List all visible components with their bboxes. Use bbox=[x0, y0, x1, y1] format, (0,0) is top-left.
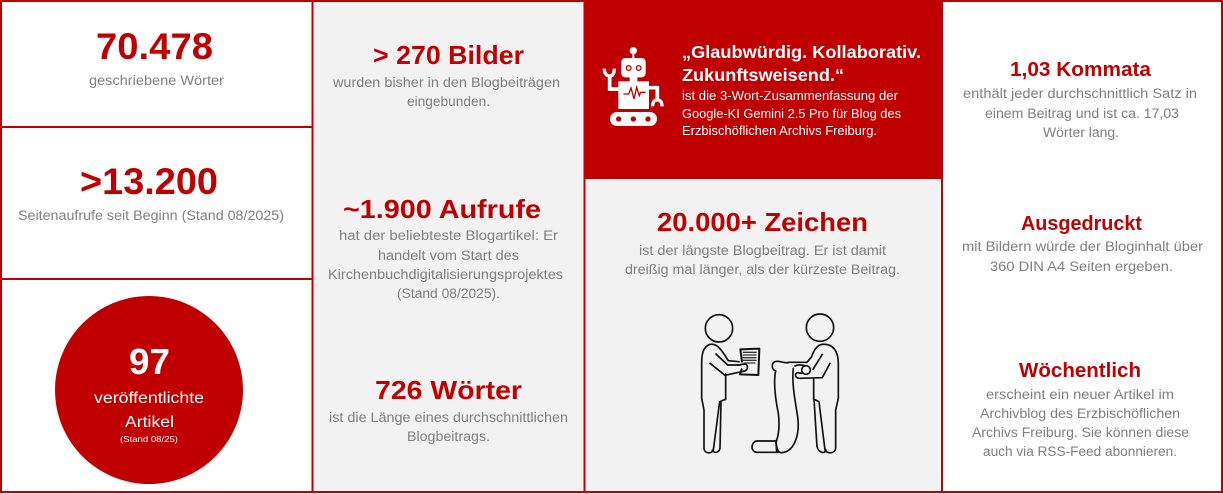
panel: Seitenaufrufe bbox=[1, 127, 312, 279]
panel: KI-Zusammenfassung bbox=[585, 1, 942, 179]
icon: person reading a sheet bbox=[702, 315, 759, 453]
stat block: Ausgedruckt bbox=[962, 213, 1203, 275]
stat block: Zeichen: 20.000+ Zeichen bbox=[657, 207, 868, 237]
stat block: Ausgedruckt: mit Bildern würde der Bloginhalt über bbox=[962, 239, 1203, 255]
stat block: Bilder: wurden bisher in den Blogbeiträgen bbox=[332, 75, 560, 91]
panel: Fakten rechts bbox=[943, 1, 1222, 492]
icon: person holding a long scroll bbox=[752, 314, 838, 453]
panel: veroeffentlichte Artikel bbox=[1, 279, 312, 492]
text: KI-Beschreibung: Google-KI Gemini 2.5 Pro für Blog des bbox=[682, 107, 901, 121]
stat block: Woechentlich: erscheint ein neuer Artikel im bbox=[986, 387, 1174, 403]
stat block: Bilder: > 270 Bilder bbox=[373, 40, 524, 70]
stat block: Aufrufe bbox=[328, 194, 563, 302]
stat block: Bilder: eingebunden. bbox=[407, 94, 490, 110]
text: KI-Beschreibung: ist die 3-Wort-Zusammenfassung der bbox=[682, 89, 898, 103]
circle badge: 97 Artikel bbox=[55, 296, 243, 484]
stat block: Aufrufe: (Stand 08/2025). bbox=[397, 286, 500, 302]
circle badge: 97 Artikel: 97 bbox=[129, 341, 170, 382]
stat block: Aufrufe: handelt vom Start des bbox=[378, 248, 519, 264]
circle badge: 97 Artikel: Artikel bbox=[125, 414, 174, 431]
stat block: Aufrufe: Kirchenbuchdigitalisierungsprojektes bbox=[328, 267, 563, 283]
stat block: Woerter: 726 Wörter bbox=[375, 375, 522, 405]
stat block: Woechentlich: Archivs Freiburg. Sie können diese bbox=[972, 425, 1189, 441]
stat block: Zeichen: ist der längste Blogbeitrag. Er ist damit bbox=[639, 243, 886, 259]
stat block: Woerter bbox=[329, 375, 568, 445]
icon: robot bbox=[604, 47, 662, 126]
stat block: Aufrufe: hat der beliebteste Blogartikel: Er bbox=[339, 228, 558, 244]
stat block: Aufrufe: ~1.900 Aufrufe bbox=[343, 194, 541, 224]
text: KI-Beschreibung bbox=[682, 89, 901, 138]
stat: 13.200: >13.200 bbox=[80, 161, 218, 202]
stat block: Bilder bbox=[332, 40, 560, 110]
panel: geschriebene Woerter bbox=[1, 1, 312, 127]
stat block: Kommata: 1,03 Kommata bbox=[1010, 59, 1152, 81]
stat block: Zeichen: dreißig mal länger, als der kürzeste Beitrag. bbox=[625, 262, 900, 278]
caption: geschriebene Woerter: geschriebene Wörter bbox=[89, 73, 224, 89]
stat block: Woechentlich: Archivblog des Erzbischöflichen bbox=[980, 406, 1180, 422]
stat block: Kommata: einem Beitrag und ist ca. 17,03 bbox=[985, 106, 1179, 122]
circle badge: 97 Artikel: veröffentlichte bbox=[94, 390, 204, 407]
circle badge: 97 Artikel: (Stand 08/25) bbox=[120, 434, 178, 444]
stat block: Woerter: ist die Länge eines durchschnittlichen bbox=[329, 410, 568, 426]
stat block: Ausgedruckt: 360 DIN A4 Seiten ergeben. bbox=[990, 259, 1173, 275]
heading: Glaubwuerdig bbox=[682, 42, 921, 85]
text: KI-Beschreibung: Erzbischöflichen Archivs Freiburg. bbox=[682, 124, 877, 138]
caption: Seitenaufrufe: Seitenaufrufe seit Beginn (Stand 08/2025) bbox=[18, 208, 284, 224]
panel: Zeichen bbox=[585, 180, 942, 492]
stat: 70.478: 70.478 bbox=[96, 26, 213, 67]
stat block: Kommata: enthält jeder durchschnittlich Satz in bbox=[963, 86, 1197, 102]
stat block: Zeichen bbox=[625, 207, 900, 278]
heading: Glaubwuerdig: „Glaubwürdig. Kollaborativ. bbox=[682, 42, 921, 62]
stat block: Woechentlich: Wöchentlich bbox=[1019, 360, 1141, 382]
stat block: Kommata: Wörter lang. bbox=[1043, 125, 1119, 141]
icon: two people with papers bbox=[702, 314, 838, 453]
stat block: Kommata bbox=[963, 59, 1197, 141]
heading: Glaubwuerdig: Zukunftsweisend.“ bbox=[682, 65, 844, 85]
stat block: Woerter: Blogbeitrags. bbox=[407, 429, 490, 445]
panel: Bilder, Aufrufe, Woerter bbox=[313, 1, 584, 492]
stat block: Woechentlich bbox=[972, 360, 1189, 460]
stat block: Woechentlich: auch via RSS-Feed abonnieren. bbox=[983, 444, 1177, 460]
stat block: Ausgedruckt: Ausgedruckt bbox=[1021, 213, 1142, 235]
